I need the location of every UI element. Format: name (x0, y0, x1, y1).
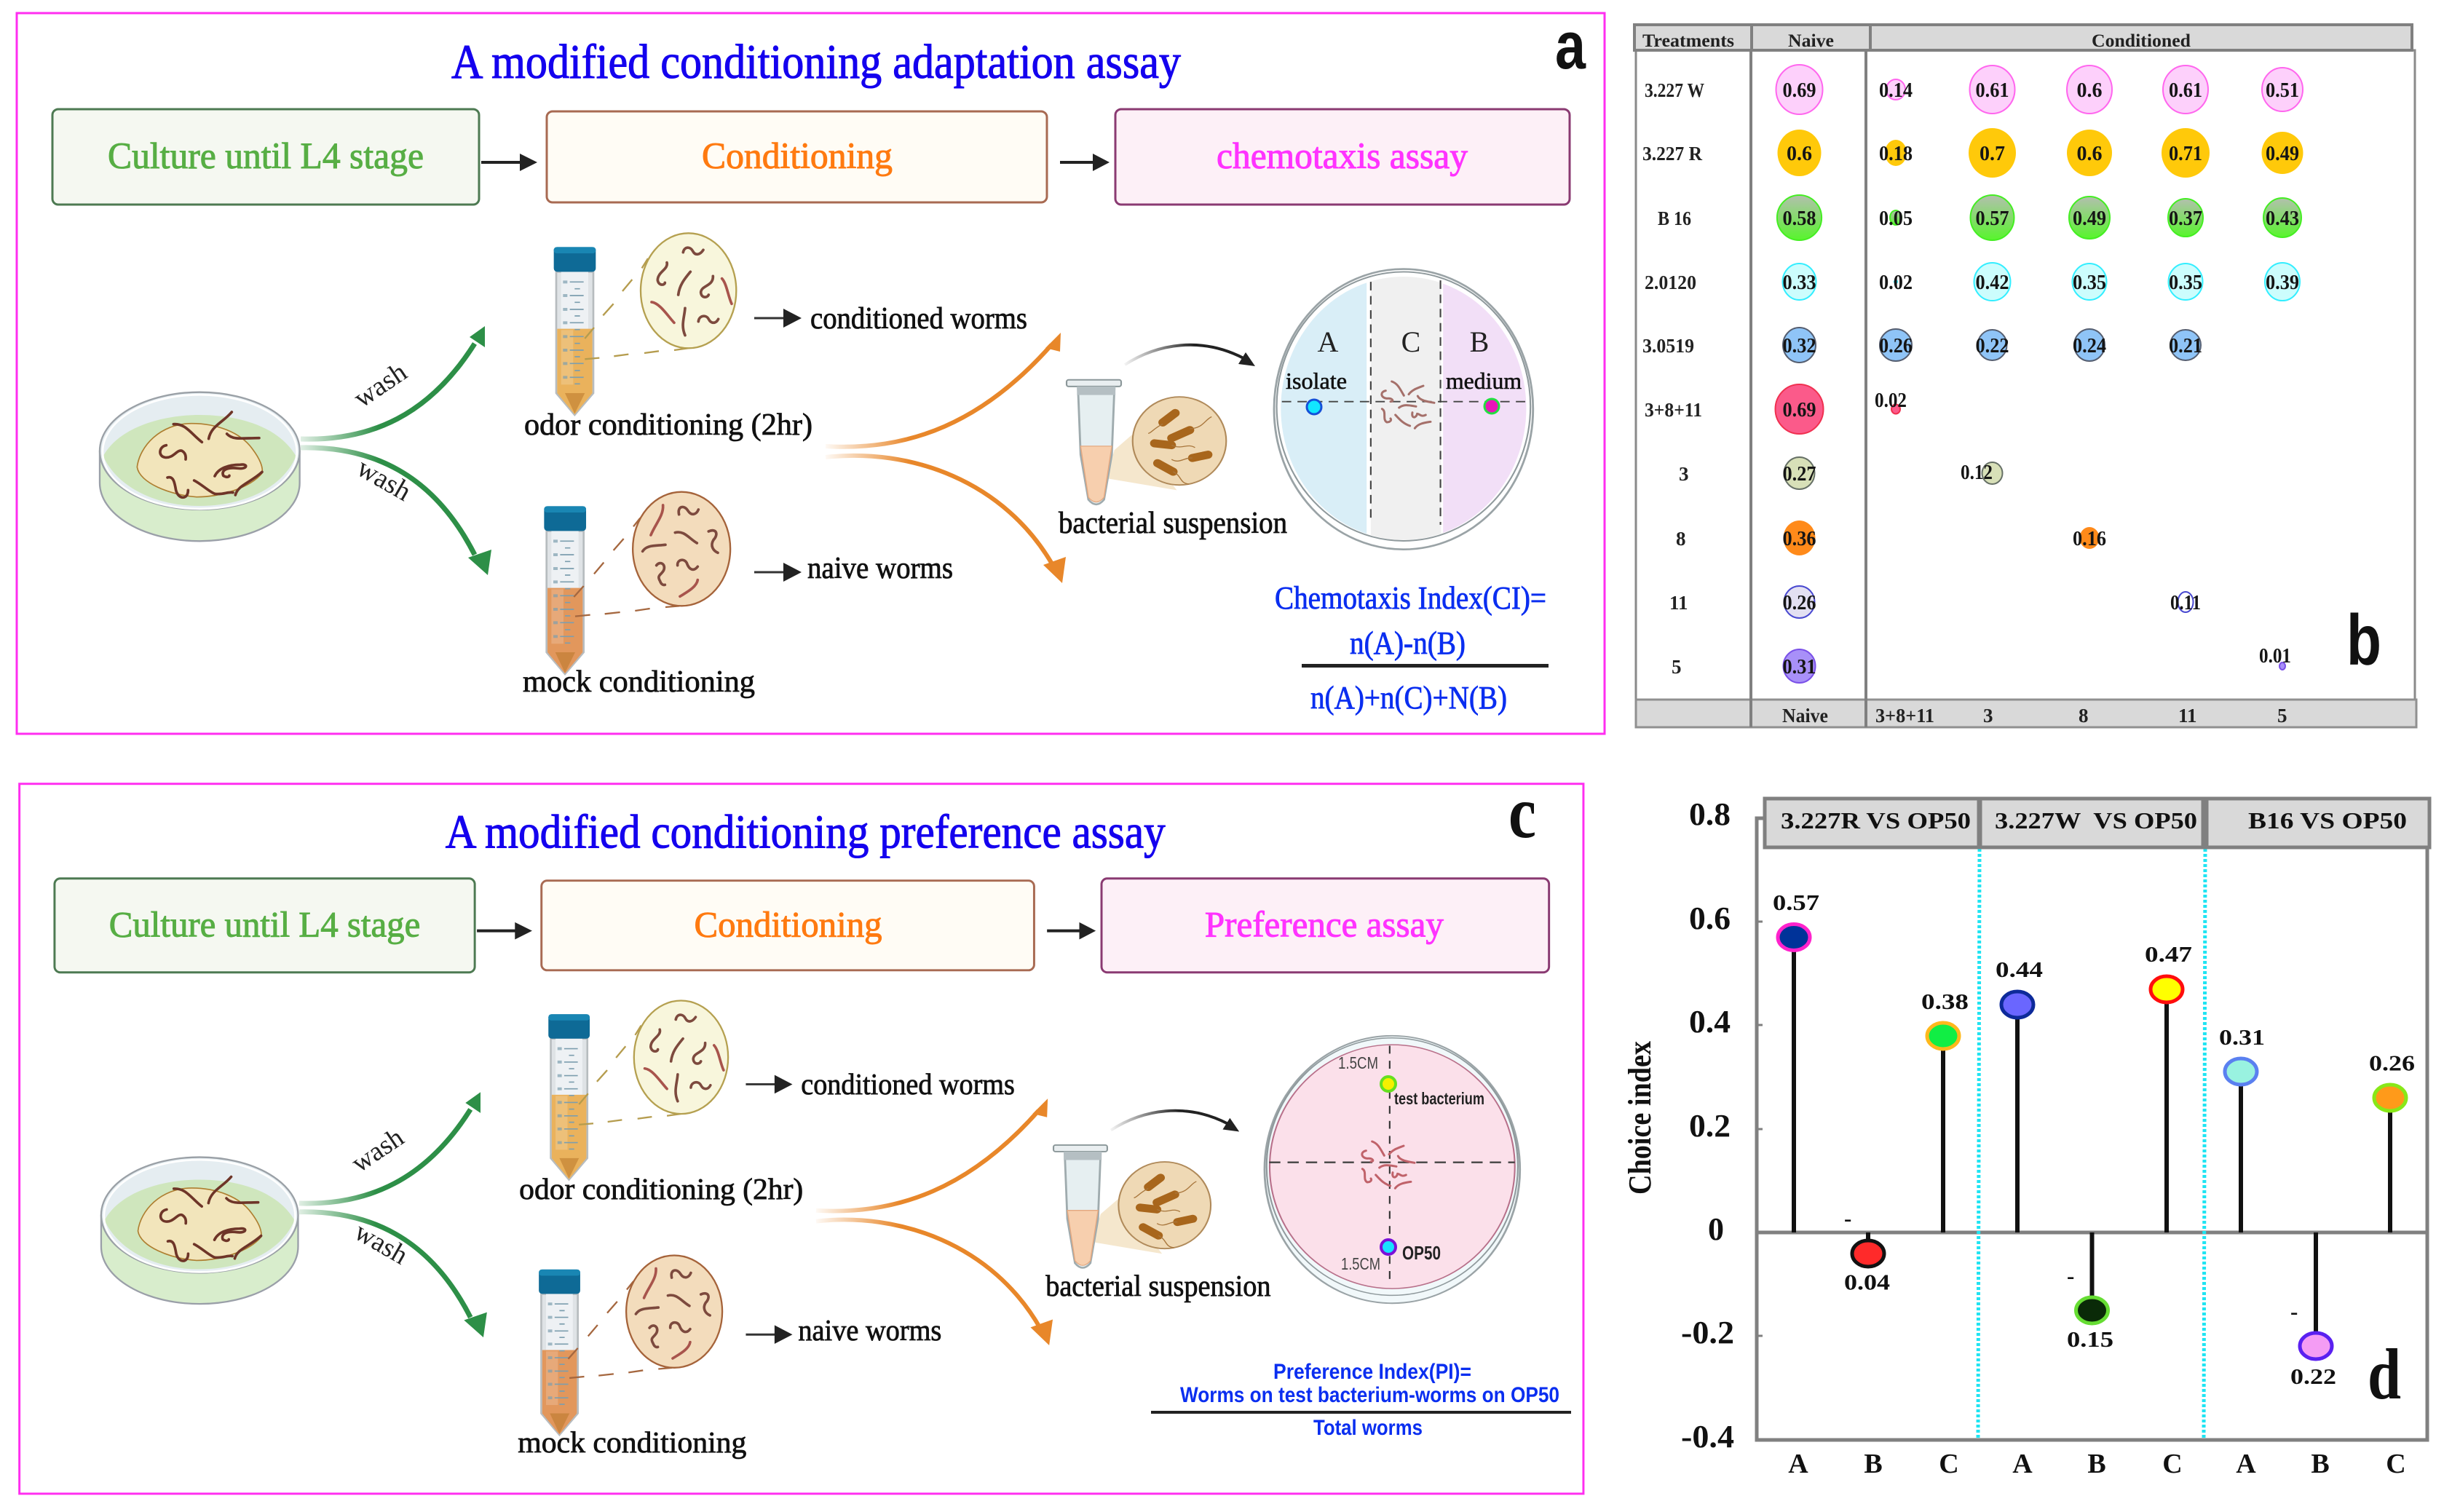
label bacterial suspension c: bacterial suspension (1045, 1269, 1271, 1302)
arrow: culture to conditioning c (477, 922, 532, 939)
table footer: Naive (1782, 705, 1828, 727)
arrow: wash up (301, 326, 485, 439)
panel a: conditioning adaptation assay (17, 9, 1605, 734)
step box: chemotaxis assay: chemotaxis assay (1217, 136, 1468, 177)
row 3.0519 (1642, 328, 2202, 363)
icon: naive worms bubble c (569, 1256, 722, 1378)
preference plate: test bacterium (1394, 1089, 1484, 1108)
chemotaxis index formula: n(A)-n(B) (1350, 625, 1466, 661)
label wash lower: wash (352, 452, 416, 507)
comparison header: 3.227R VS OP50 (1765, 799, 1979, 847)
panel label c: c (1508, 772, 1536, 854)
icon: bacterial suspension (1067, 380, 1226, 504)
row 11: 0.26 (1782, 592, 1816, 614)
lollipop C 0.47: 0.47 (2145, 941, 2192, 967)
arrow: wash up c (299, 1092, 481, 1203)
row 11: 0.11 (2170, 592, 2201, 614)
y axis tick labels (1681, 796, 1734, 1454)
lollipop C 0.26: 0.26 (2369, 1050, 2415, 1076)
preference plate: 1.5CM (1338, 1053, 1378, 1072)
preference index formula (1151, 1360, 1571, 1440)
arrow to conditioned worms (754, 309, 802, 328)
arrow: wash down c (299, 1212, 487, 1337)
row 3.0519: 0.26 (1879, 335, 1913, 357)
row B 16: 0.37 (2169, 207, 2202, 230)
row 3: 0.27 (1782, 463, 1816, 486)
y axis tick labels: -0.2 (1681, 1315, 1734, 1350)
table header: Treatments (1642, 31, 1734, 51)
shared scaled layout of panel c (20, 784, 1583, 1494)
row 3.227 W: 0.6 (2076, 79, 2103, 102)
row B 16: 0.58 (1782, 207, 1816, 230)
row B 16: 0.05 (1879, 207, 1913, 230)
arrow: orange down c (816, 1219, 1053, 1345)
chemotaxis index formula (1275, 580, 1549, 716)
row 3+8+11: 3+8+11 (1645, 399, 1702, 421)
step box: conditioning c (542, 881, 1034, 970)
row 8: 8 (1676, 528, 1686, 550)
row 3.227 W: 0.69 (1782, 79, 1816, 102)
chemotaxis plate: medium (1446, 368, 1522, 394)
icon: odor conditioning tube (554, 247, 596, 415)
row 2.0120: 0.02 (1879, 272, 1913, 294)
row B 16 (1658, 195, 2301, 240)
row 3.0519: 0.32 (1782, 335, 1816, 357)
row 3.227 R (1642, 128, 2303, 178)
lollipop B -0.15: - (2067, 1263, 2074, 1289)
x axis labels: A (2012, 1449, 2033, 1479)
label mock conditioning c: mock conditioning (518, 1425, 746, 1459)
row 3.227 R: 3.227 R (1642, 143, 1702, 165)
lollipop A 0.57: 0.57 (1773, 890, 1819, 915)
panel d: choice index lollipop chart (1622, 796, 2429, 1479)
table footer: 11 (2178, 705, 2197, 727)
row 3.227 W: 0.14 (1879, 79, 1913, 102)
panel label d: d (2368, 1334, 2401, 1414)
arrow: orange up (826, 333, 1061, 447)
lollipop C 0.38: 0.38 (1921, 989, 1969, 1014)
row 3.0519: 0.22 (1976, 335, 2009, 357)
y axis tick labels: 0.8 (1689, 796, 1731, 832)
row 3.227 W: 0.61 (1976, 79, 2009, 102)
row 3+8+11: 0.69 (1782, 399, 1816, 421)
comparison header: 3.227R VS OP50: 3.227R VS OP50 (1781, 807, 1971, 834)
arrow to naive worms c (746, 1325, 792, 1344)
lollipop B -0.15: 0.15 (2067, 1326, 2113, 1352)
row 3+8+11: 0.02 (1875, 389, 1907, 412)
x axis labels: A (2236, 1449, 2256, 1479)
row 8: 0.36 (1782, 528, 1816, 550)
row B 16: 0.57 (1976, 207, 2009, 230)
row 3.227 R: 0.18 (1879, 143, 1913, 165)
label conditioned worms: conditioned worms (810, 302, 1027, 336)
chemotaxis plate: A (1318, 325, 1339, 358)
step box: culture: Culture until L4 stage (108, 136, 424, 177)
table frame (1634, 25, 2416, 727)
icon: naive worms bubble (574, 492, 730, 617)
step box: culture (52, 109, 479, 205)
label naive worms c: naive worms (798, 1313, 941, 1347)
comparison header: B16 VS OP50: B16 VS OP50 (2248, 807, 2407, 834)
lollipop C 0.26 (2369, 1050, 2415, 1232)
lollipop A 0.44: 0.44 (1996, 957, 2043, 982)
row 8 (1676, 521, 2106, 555)
step box: conditioning: Conditioning (702, 136, 893, 177)
y axis tick labels: 0.4 (1689, 1004, 1731, 1040)
row 5 (1672, 645, 2291, 683)
chemotaxis plate: C (1401, 325, 1420, 358)
y axis tick labels: 0.6 (1689, 901, 1731, 936)
step box: conditioning c: Conditioning (695, 904, 882, 945)
cyan dividers (1978, 849, 2205, 1438)
table footer: 3 (1983, 705, 1993, 727)
lollipop B -0.22: - (2290, 1299, 2298, 1324)
row 3.227 W: 0.51 (2266, 79, 2299, 102)
row 3.227 R: 0.6 (2076, 143, 2103, 165)
row 2.0120: 0.35 (2169, 272, 2202, 294)
panel a frame (17, 13, 1605, 734)
icon: conditioned worms bubble c (579, 1001, 728, 1125)
lollipop A 0.31 (2219, 1024, 2265, 1232)
preference index formula: Total worms (1313, 1416, 1423, 1440)
row 2.0120: 2.0120 (1645, 272, 1696, 293)
table footer: 8 (2079, 705, 2088, 727)
step box: chemotaxis assay (1115, 109, 1570, 205)
panel c: conditioning preference assay (20, 772, 1583, 1494)
chemotaxis plate: isolate (1286, 368, 1347, 394)
lollipop C 0.38 (1921, 989, 1969, 1232)
row 3.227 R: 0.49 (2266, 143, 2299, 165)
preference plate: OP50 (1402, 1242, 1441, 1264)
table header: Conditioned (2092, 31, 2191, 51)
row 3.0519: 0.21 (2169, 335, 2202, 357)
row 2.0120 (1645, 263, 2300, 301)
lollipop B -0.22: 0.22 (2290, 1363, 2336, 1389)
row 8: 0.16 (2073, 528, 2106, 550)
panel label b: b (2346, 600, 2381, 680)
y axis tick labels: 0 (1708, 1211, 1724, 1247)
row B 16: B 16 (1658, 207, 1691, 229)
x axis labels: C (2386, 1449, 2406, 1479)
arrow to naive worms (754, 563, 802, 582)
icon: bacterial suspension c (1053, 1145, 1211, 1267)
icon: conditioned worms bubble (585, 233, 736, 359)
arrow: culture to conditioning (481, 154, 537, 171)
panel c frame (20, 784, 1583, 1494)
row 3+8+11 (1645, 384, 1907, 434)
label odor conditioning c: odor conditioning (2hr) (519, 1172, 803, 1206)
row 3 (1679, 457, 2002, 489)
label odor conditioning: odor conditioning (2hr) (524, 408, 812, 442)
x axis labels: A (1788, 1449, 1808, 1479)
comparison header: 3.227W VS OP50: 3.227W VS OP50 (1995, 807, 2197, 834)
step box: preference assay (1102, 879, 1549, 973)
row 2.0120: 0.42 (1976, 272, 2009, 294)
lollipop C 0.47 (2145, 941, 2192, 1232)
x axis labels: B (2311, 1449, 2330, 1479)
row 11 (1669, 586, 2201, 618)
arrow: suspension to plate c (1111, 1111, 1239, 1131)
y axis title: Choice index (1622, 1041, 1658, 1195)
x axis labels: B (1864, 1449, 1883, 1479)
row 3.0519: 3.0519 (1642, 335, 1694, 357)
comparison header: 3.227W VS OP50 (1980, 799, 2203, 847)
row 3.227 R: 0.71 (2169, 143, 2202, 165)
label bacterial suspension: bacterial suspension (1059, 507, 1287, 540)
title a: A modified conditioning adaptation assay (451, 35, 1181, 89)
label mock conditioning: mock conditioning (523, 665, 755, 699)
row B 16: 0.43 (2266, 207, 2299, 230)
lollipop B -0.04 (1844, 1206, 1890, 1294)
row 2.0120: 0.35 (2073, 272, 2106, 294)
step box: conditioning (547, 111, 1047, 202)
row 3.227 W: 0.61 (2169, 79, 2202, 102)
row 11: 11 (1669, 592, 1688, 614)
row 5: 0.31 (1782, 656, 1816, 678)
lollipop A 0.57 (1773, 890, 1819, 1232)
x axis labels (1788, 1449, 2406, 1479)
table footer: 5 (2277, 705, 2287, 727)
row 3.227 W: 3.227 W (1645, 79, 1704, 101)
arrow to conditioned worms c (746, 1075, 792, 1093)
panel label a: a (1555, 9, 1586, 83)
arrow: orange up c (816, 1099, 1048, 1211)
row B 16: 0.49 (2073, 207, 2106, 230)
chemotaxis index formula: n(A)+n(C)+N(B) (1310, 680, 1507, 716)
label naive worms: naive worms (807, 552, 953, 585)
lollipop B -0.04: - (1844, 1206, 1851, 1231)
step box: culture c (55, 879, 475, 973)
x axis labels: B (2087, 1449, 2106, 1479)
preference plate: 1.5CM (1341, 1254, 1380, 1273)
title c: A modified conditioning preference assay (446, 805, 1166, 858)
label conditioned worms c: conditioned worms (801, 1067, 1015, 1101)
table footer: 3+8+11 (1875, 705, 1934, 727)
panel b: bubble table (1634, 25, 2416, 727)
row 5: 0.01 (2259, 645, 2291, 668)
row 3: 3 (1679, 463, 1689, 485)
y axis tick labels: 0.2 (1689, 1108, 1731, 1144)
arrow: conditioning to preference (1047, 922, 1096, 939)
x axis labels: C (1939, 1449, 1959, 1479)
arrow: wash down (301, 448, 491, 575)
lollipop B -0.04: 0.04 (1844, 1270, 1890, 1294)
table header (1642, 31, 2191, 51)
chemotaxis plate (1273, 269, 1537, 550)
comparison header: B16 VS OP50 (2207, 799, 2429, 847)
icon: culture dish with worms (100, 392, 300, 541)
preference plate (1265, 1036, 1520, 1303)
lollipop B -0.15 (2067, 1232, 2113, 1352)
icon: mock conditioning tube (544, 506, 586, 674)
arrow: conditioning to chemotaxis (1060, 154, 1110, 171)
label wash lower c: wash (349, 1217, 413, 1271)
chemotaxis plate: B (1470, 325, 1489, 358)
icon: odor tube c (548, 1014, 590, 1179)
lollipop A 0.44 (1996, 957, 2043, 1232)
row 3.227 R: 0.6 (1787, 143, 1812, 165)
label wash upper c: wash (346, 1123, 409, 1179)
row 2.0120: 0.33 (1782, 272, 1816, 294)
lollipop A 0.31: 0.31 (2219, 1024, 2265, 1050)
preference index formula: Worms on test bacterium-worms on OP50 (1180, 1383, 1559, 1407)
preference index formula: Preference Index(PI)= (1273, 1360, 1471, 1384)
row 3.227 R: 0.7 (1980, 143, 2005, 165)
row 5: 5 (1672, 656, 1682, 678)
row 3.227 W (1645, 65, 2303, 114)
step box: culture c: Culture until L4 stage (109, 904, 420, 945)
chemotaxis index formula: Chemotaxis Index(CI)= (1275, 580, 1546, 616)
icon: culture dish c (101, 1157, 298, 1304)
icon: mock tube c (539, 1270, 580, 1435)
arrow: suspension to plate (1125, 345, 1255, 366)
row 3.0519: 0.24 (2073, 335, 2106, 357)
row 3: 0.12 (1961, 462, 1993, 484)
table footer (1782, 705, 2287, 727)
row 2.0120: 0.39 (2266, 272, 2299, 294)
lollipop B -0.22 (2290, 1232, 2336, 1389)
plot frame and axes (1757, 818, 2427, 1440)
arrow: orange down (826, 456, 1066, 583)
table header: Naive (1788, 31, 1834, 51)
y axis tick labels: -0.4 (1681, 1419, 1734, 1454)
x axis labels: C (2162, 1449, 2183, 1479)
step box: preference assay: Preference assay (1205, 904, 1444, 945)
label wash upper: wash (348, 357, 413, 413)
